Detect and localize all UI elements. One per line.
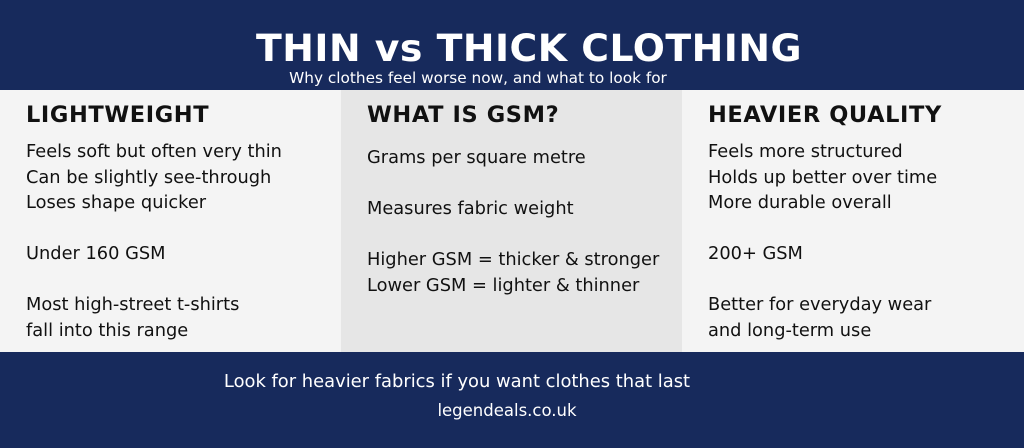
panel: what is gsm — [341, 90, 682, 352]
text: lightweight details: Loses shape quicker — [26, 192, 206, 213]
text: heavier details: More durable overall — [708, 192, 892, 213]
text: heavier details: 200+ GSM — [708, 243, 803, 264]
footer — [0, 352, 1024, 448]
footer url: legendeals.co.uk — [437, 401, 577, 420]
footer message: Look for heavier fabrics if you want clothes that last — [224, 371, 690, 392]
text: gsm explanation: Grams per square metre — [367, 147, 586, 168]
text: heavier details: and long-term use — [708, 320, 871, 340]
panel: heavier quality — [682, 90, 1024, 352]
text: gsm explanation: Lower GSM = lighter & thinner — [367, 274, 639, 296]
text: lightweight details: Feels soft but often very thin — [26, 141, 282, 162]
text: lightweight details: Can be slightly see-through — [26, 166, 271, 188]
header — [0, 0, 1024, 90]
subtitle: Why clothes feel worse now, and what to look for — [289, 69, 667, 87]
text: lightweight details: Most high-street t-shirts — [26, 294, 239, 315]
heading: what is gsm: WHAT IS GSM? — [367, 102, 559, 128]
text: lightweight details: Under 160 GSM — [26, 243, 165, 264]
title: THIN vs THICK CLOTHING — [256, 26, 802, 70]
text: lightweight details: fall into this range — [26, 320, 188, 340]
text: gsm explanation: Higher GSM = thicker & stronger — [367, 249, 659, 270]
text: heavier details: Feels more structured — [708, 141, 903, 162]
text: gsm explanation — [367, 147, 660, 296]
text: heavier details: Holds up better over time — [708, 166, 937, 188]
panel: lightweight — [0, 90, 341, 352]
text: heavier details — [708, 141, 937, 340]
text: gsm explanation: Measures fabric weight — [367, 198, 574, 219]
text: heavier details: Better for everyday wear — [708, 294, 931, 315]
heading: lightweight: LIGHTWEIGHT — [26, 102, 209, 128]
heading: heavier quality: HEAVIER QUALITY — [708, 102, 942, 128]
text: lightweight details — [26, 141, 282, 340]
